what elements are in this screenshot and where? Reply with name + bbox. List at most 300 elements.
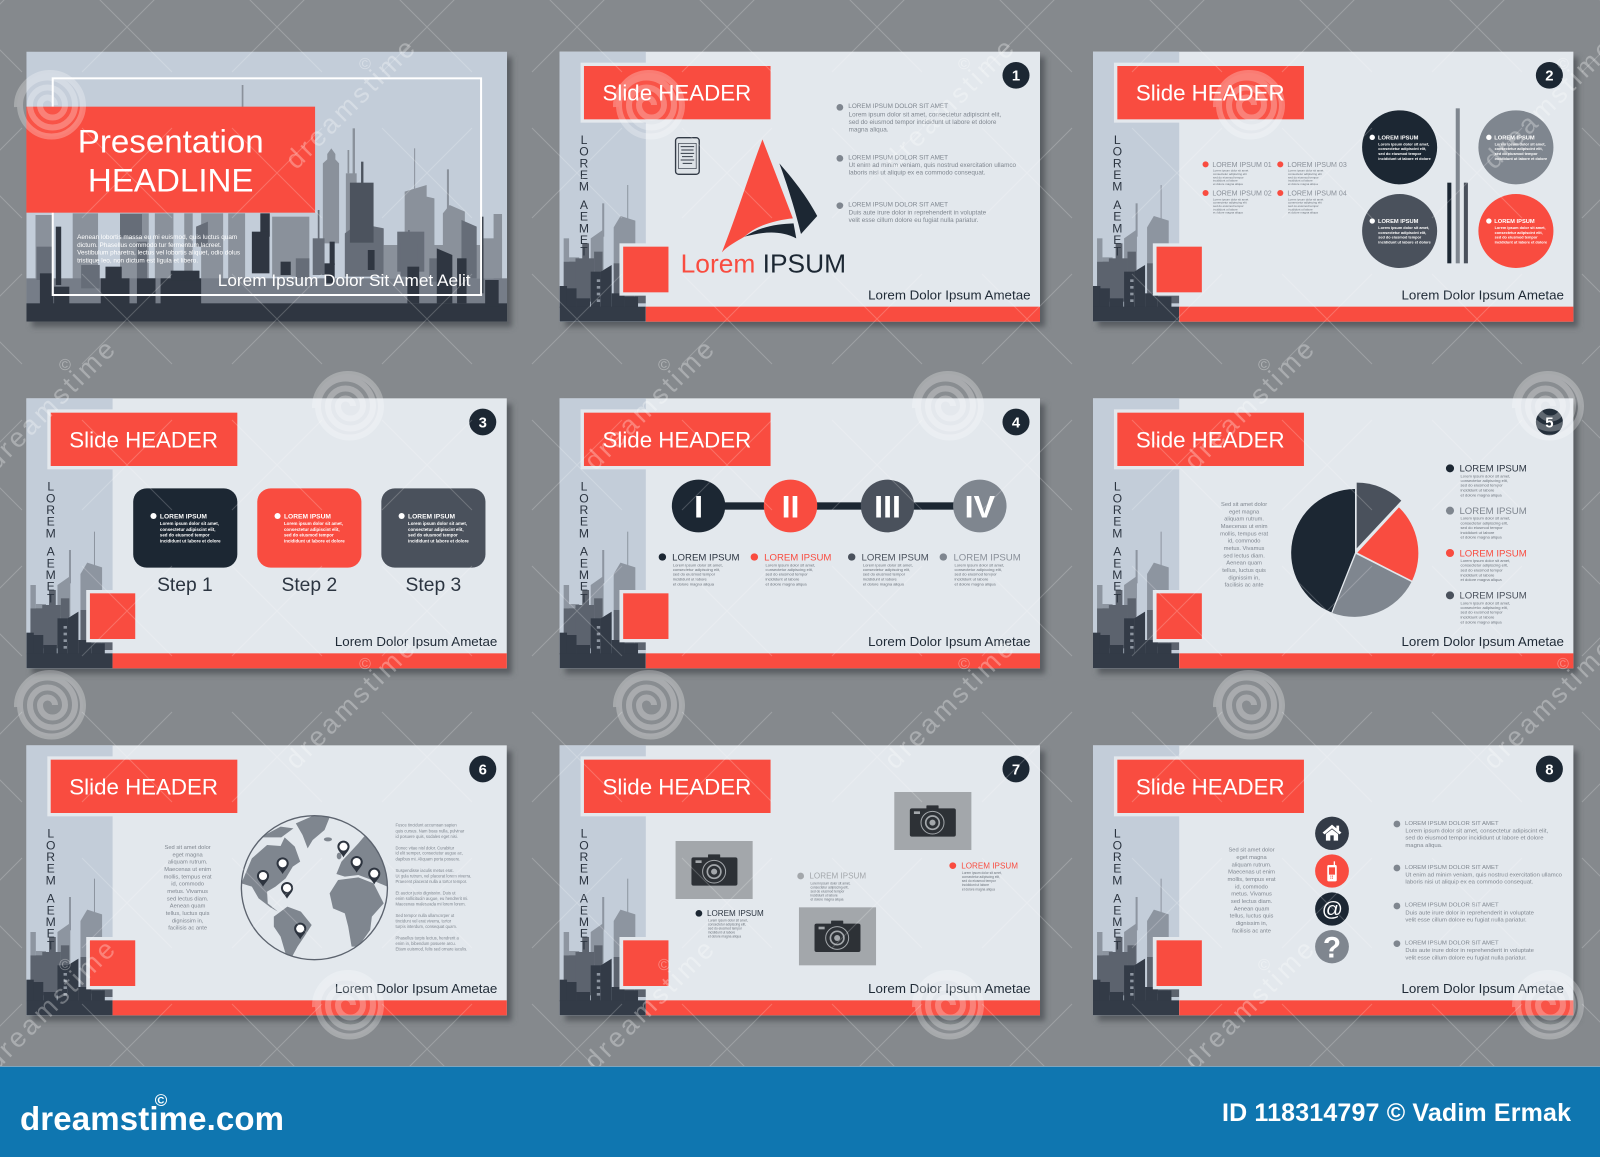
bullet list: LOREM IPSUM DOLOR SIT AMET (848, 154, 948, 161)
watermark text: dreamstime (578, 934, 720, 1076)
body copy: sed lectus diam. (167, 896, 209, 902)
timeline item 3: consectetur adipiscing elit, (863, 567, 910, 572)
right column copy: tincidunt vel erat viverra, tortor (396, 918, 452, 923)
legend: et dolore magna aliqua (1460, 492, 1502, 497)
legend: consectetur adipiscing elit, (1460, 563, 1508, 568)
body copy: Sed sit amet dolor (165, 845, 211, 851)
photo placeholder 1 (676, 841, 753, 899)
circle: dark: consectetur adipiscint elit, (1378, 147, 1426, 151)
list of four items: et dolore magna aliqua (1288, 182, 1318, 186)
watermark text: dreamstime (1178, 934, 1320, 1076)
watermark text: © (958, 656, 970, 673)
timeline item 4: consectetur adipiscing elit, (954, 567, 1002, 572)
body copy: Maecenas ut enim (1221, 524, 1268, 530)
step card 2: sed do eiusmod tempor (284, 533, 334, 538)
footer: Lorem Dolor Ipsum Ametae (1402, 981, 1564, 996)
panel: slide 1 logo (560, 52, 1040, 322)
watermark text: dreamstime (578, 334, 720, 476)
caption red: sed do eiusmod tempor (962, 879, 997, 883)
body copy: metus. Vivamus (167, 889, 208, 895)
caption red: et dolore magna aliqua (962, 887, 995, 891)
legend: et dolore magna aliqua (1460, 577, 1502, 582)
bullet list: Lorem ipsum dolor sit amet, consectetur adipiscint elit, (849, 111, 1002, 118)
list of four items: Lorem ipsum dolor sit amet (1213, 197, 1248, 201)
watermark text: dreamstime (878, 633, 1020, 775)
legend: et dolore magna aliqua (1460, 535, 1502, 540)
timeline item 1: sed do eiusmod tempor (673, 572, 716, 577)
list of four items: consectetur adipiscing elit (1213, 201, 1247, 205)
panel: slide 6 world map (26, 745, 507, 1015)
circle: grey: sed do eiusmod tempor (1495, 152, 1538, 156)
right column copy: Et auctor justo dignissim. Duis ut (396, 891, 456, 896)
number: 2 (1545, 69, 1554, 85)
timeline item 4: sed do eiusmod tempor (954, 572, 997, 577)
caption red: incididunt ut labore (962, 883, 989, 887)
bars (1447, 108, 1468, 263)
body copy: Aenean quam (1226, 561, 1262, 567)
number: 6 (479, 762, 487, 778)
footer: Lorem Dolor Ipsum Ametae (868, 634, 1031, 649)
step card 1: consectetur adipiscint elit, (160, 527, 215, 532)
globe with pins (241, 816, 387, 960)
watermark text: © (359, 656, 371, 673)
circle: slate: incididunt ut labore et dolore (1378, 241, 1431, 245)
caption red: consectetur adipiscing elit, (962, 875, 1000, 879)
legend: incididunt ut labore (1460, 488, 1495, 493)
right column copy: id elit semper, consectetur augue ac, (396, 851, 463, 856)
list of four items: et dolore magna aliqua (1288, 211, 1318, 215)
watermark text: © (658, 357, 670, 374)
timeline item 3 (848, 552, 929, 586)
body copy: Aenean quam (170, 904, 206, 910)
caption grey: incididunt ut labore (810, 893, 838, 897)
white frame (53, 78, 481, 295)
caption dark: sed do eiusmod tempor (708, 926, 743, 930)
number: 1 (1012, 69, 1020, 85)
timeline item 1 (659, 552, 740, 586)
bullet list: laboris nisi ut aliquip ex ea commodo consequat. (849, 170, 986, 177)
watermark text: dreamstime (878, 33, 1020, 175)
icon: phone (1315, 854, 1349, 888)
timeline item 1: Lorem ipsum dolor sit amet, (673, 562, 723, 567)
bullet list (1394, 821, 1563, 961)
image id and author: ID 118314797 © Vadim Ermak (1222, 1099, 1571, 1127)
circle: dark: incididunt ut labore et dolore (1378, 157, 1431, 161)
legend: consectetur adipiscing elit, (1460, 478, 1508, 483)
brand logo: dreamstime.com (20, 1100, 284, 1137)
right column copy: Praesent placerat nulla a tortor tempor. (396, 879, 467, 884)
footer: Lorem Dolor Ipsum Ametae (868, 287, 1031, 302)
icon: question mark: ? (1323, 932, 1341, 964)
step card 1: incididunt ut labore et dolore (160, 539, 221, 544)
caption grey: consectetur adipiscing elit, (810, 885, 849, 889)
panel: slide 4 timeline (560, 398, 1040, 668)
legend: sed do eiusmod tempor (1460, 525, 1503, 530)
logo text: Lorem IPSUM (681, 249, 846, 278)
timeline item 1: incididunt ut labore (673, 577, 708, 582)
cover body text: Vestibulum pharetra, lectus vel lobortis aliquet, odio dolus (77, 250, 240, 257)
circle: grey (1478, 110, 1553, 184)
caption dark: consectetur adipiscing elit, (708, 922, 746, 926)
headline: HEADLINE (88, 162, 254, 199)
legend (1446, 464, 1527, 624)
body copy: tellus, luctus quis (166, 911, 210, 917)
bottom brand band (0, 1066, 1600, 1157)
right column copy: Etiam euismod, felis sed ornare iaculis. (396, 947, 467, 952)
right column copy: Phasellus turpis lectus, hendrerit a (396, 936, 460, 941)
cover red title block (26, 107, 315, 213)
circle: dark: LOREM IPSUM (1378, 135, 1419, 141)
step card 2: consectetur adipiscint elit, (284, 527, 340, 532)
body copy: mollis, tempus erat (1228, 877, 1276, 883)
number: 8 (1545, 762, 1554, 778)
step labels: Step 1 (157, 575, 213, 596)
body copy: tellus, luctus quis (1222, 568, 1266, 574)
slide header: Slide HEADER (1136, 774, 1285, 799)
timeline item 4: incididunt ut labore (954, 577, 989, 582)
caption dark: incididunt ut labore (708, 930, 735, 934)
caption grey (797, 872, 866, 901)
step card 3: incididunt ut labore et dolore (408, 539, 469, 544)
icon: question mark (1315, 930, 1349, 964)
step card 3: LOREM IPSUM (408, 513, 456, 520)
timeline item 2: sed do eiusmod tempor (765, 572, 808, 577)
watermark text: © (59, 357, 71, 374)
timeline item 2 (751, 552, 831, 586)
list of four items: et dolore magna aliqua (1213, 182, 1243, 186)
number: 4 (1012, 415, 1021, 431)
bullet list: Ut enim ad minim veniam, quis nostrud exercitation ullamco (1405, 872, 1563, 878)
photo placeholder 2 (799, 907, 876, 965)
icon: tablet (676, 138, 699, 174)
list of four items (1203, 161, 1347, 215)
body copy: mollis, tempus erat (1220, 531, 1269, 537)
circle: dark: Lorem ipsum dolor sit amet, (1378, 142, 1429, 146)
watermark text: © (1557, 56, 1569, 73)
timeline: IV (965, 489, 996, 525)
body copy: eget magna (172, 852, 204, 858)
footer: Lorem Dolor Ipsum Ametae (1402, 287, 1564, 302)
list of four items: Lorem ipsum dolor sit amet (1213, 169, 1248, 173)
icon: at sign: @ (1321, 898, 1343, 921)
watermark text: dreamstime (279, 33, 421, 175)
list of four items: LOREM IPSUM 04 (1287, 191, 1347, 198)
bullet list: LOREM IPSUM DOLOR SIT AMET (848, 103, 948, 110)
slide header: Slide HEADER (603, 427, 751, 452)
bullet list: LOREM IPSUM DOLOR SIT AMET (848, 201, 948, 208)
legend: Lorem ipsum dolor sit amet, (1460, 600, 1510, 605)
timeline item 2: Lorem ipsum dolor sit amet, (765, 562, 815, 567)
timeline item 3: LOREM IPSUM (862, 552, 929, 563)
body copy: Maecenas ut enim (164, 867, 211, 873)
right column copy: quis cursus. Nam boas nulla, pulvinar (396, 828, 465, 833)
bullet list: velit esse cillum dolore eu fugiat nulla pariatur. (1405, 918, 1527, 924)
circle: red: sed do eiusmod tempor (1495, 236, 1538, 240)
slide header: Slide HEADER (1136, 427, 1285, 452)
bullet list: LOREM IPSUM DOLOR SIT AMET (1405, 821, 1499, 827)
timeline: II (782, 489, 799, 525)
step card 2: incididunt ut labore et dolore (284, 539, 345, 544)
caption dark (696, 909, 764, 938)
list of four items: LOREM IPSUM 03 (1287, 162, 1347, 169)
list of four items: incididunt ut labore (1213, 179, 1238, 183)
legend: incididunt ut labore (1460, 615, 1495, 620)
legend: sed do eiusmod tempor (1460, 483, 1503, 488)
circle: slate: LOREM IPSUM (1378, 219, 1419, 225)
right column copy: Suspendisse iaculis metus erat. (396, 868, 454, 873)
watermark text: dreamstime (279, 633, 421, 775)
body copy: aliquam rutrum. (1232, 862, 1272, 868)
timeline item 2: et dolore magna aliqua (765, 581, 807, 586)
step card 1 (133, 488, 237, 568)
circle: grey: consectetur adipiscint elit, (1495, 147, 1543, 151)
timeline item 3: Lorem ipsum dolor sit amet, (863, 562, 913, 567)
watermark text: © (1258, 957, 1270, 974)
right column copy: enim sollicitudin augue, eu hendrerit mi. (396, 896, 468, 901)
side label: LOREM AEMET (579, 133, 589, 259)
body copy: metus. Vivamus (1224, 546, 1265, 552)
body copy: sed lectus diam. (1231, 899, 1273, 905)
footer: Lorem Dolor Ipsum Ametae (1402, 634, 1564, 649)
step card 1: Lorem ipsum dolor sit amet, (160, 521, 219, 526)
body copy: dignissim in, (1236, 921, 1268, 927)
circle: slate: consectetur adipiscint elit, (1378, 231, 1426, 235)
body copy: facilisis ac ante (1225, 583, 1264, 589)
panel: cover slide (26, 52, 507, 322)
body copy: dignissim in, (172, 918, 204, 924)
number: 3 (479, 415, 487, 431)
legend: sed do eiusmod tempor (1460, 610, 1503, 615)
circle: grey: Lorem ipsum dolor sit amet, (1495, 142, 1546, 146)
timeline item 4: et dolore magna aliqua (954, 581, 996, 586)
bullet list: magna aliqua. (1405, 843, 1443, 849)
side label: LOREM AEMET (1112, 480, 1122, 605)
circle: red: incididunt ut labore et dolore (1495, 241, 1547, 245)
list of four items: sed do eiusmod tempor (1213, 204, 1244, 208)
footer: Lorem Dolor Ipsum Ametae (335, 981, 497, 996)
cover skyline (26, 52, 507, 322)
timeline item 2: LOREM IPSUM (764, 552, 831, 563)
number: 7 (1012, 762, 1020, 778)
timeline item 4: LOREM IPSUM (953, 552, 1021, 563)
caption dark: LOREM IPSUM (707, 909, 764, 918)
body copy: Sed sit amet dolor (1228, 848, 1275, 854)
step card 2: LOREM IPSUM (284, 513, 331, 520)
bullet list: sed do eiusmod tempor incididunt ut labore et dolore (849, 119, 997, 126)
caption grey: sed do eiusmod tempor (810, 889, 845, 893)
list of four items: et dolore magna aliqua (1213, 211, 1243, 215)
legend: incididunt ut labore (1460, 530, 1495, 535)
right column copy: id posuere quis, sodales eget nisi. (396, 834, 458, 839)
panel: slide 3 steps (26, 398, 507, 668)
bullet list: Duis aute irure dolor in reprehenderit in voluptate (1405, 910, 1535, 916)
panel: slide 5 pie chart (1093, 398, 1573, 668)
legend: incididunt ut labore (1460, 572, 1495, 577)
circle: red: consectetur adipiscint elit, (1495, 231, 1543, 235)
step card 2: Lorem ipsum dolor sit amet, (284, 521, 343, 526)
list of four items: consectetur adipiscing elit (1288, 172, 1322, 176)
photo placeholder 3 (894, 792, 971, 850)
timeline: III (874, 489, 901, 525)
watermark text: © (658, 957, 670, 974)
bullet list: Duis aute irure dolor in reprehenderit in voluptate (1405, 948, 1535, 954)
bullet list: velit esse cillum dolore eu fugiat nulla pariatur. (1405, 955, 1527, 961)
timeline item 2: consectetur adipiscing elit, (765, 567, 813, 572)
side label: LOREM AEMET (579, 480, 589, 605)
panel: slide 8 contact (1093, 745, 1573, 1015)
body copy: id, commodo (1228, 539, 1261, 545)
timeline item 3: sed do eiusmod tempor (863, 572, 906, 577)
step card 3: sed do eiusmod tempor (408, 533, 458, 538)
list of four items: LOREM IPSUM 02 (1212, 191, 1272, 198)
bullet list (836, 103, 1017, 224)
bullet list: laboris nisi ut aliquip ex ea commodo consequat. (1405, 880, 1534, 886)
headline: Presentation (78, 123, 264, 159)
circle: slate: sed do eiusmod tempor (1378, 236, 1422, 240)
circle: slate: Lorem ipsum dolor sit amet, (1378, 226, 1429, 230)
body copy: Maecenas ut enim (1228, 870, 1275, 876)
list of four items: consectetur adipiscing elit (1288, 201, 1322, 205)
bullet list: Duis aute irure dolor in reprehenderit in voluptate (849, 209, 987, 216)
list of four items: LOREM IPSUM 01 (1212, 162, 1272, 169)
timeline item 1: et dolore magna aliqua (673, 581, 715, 586)
body copy: id, commodo (1235, 884, 1268, 890)
legend: LOREM IPSUM (1459, 548, 1527, 559)
legend: Lorem ipsum dolor sit amet, (1460, 558, 1510, 563)
step card 3: Lorem ipsum dolor sit amet, (408, 521, 467, 526)
watermark text: © (1557, 656, 1569, 673)
timeline (672, 480, 1007, 532)
icon: home (1315, 817, 1349, 850)
body copy: eget magna (1236, 855, 1268, 861)
list of four items: incididunt ut labore (1288, 207, 1313, 211)
step card 3: consectetur adipiscint elit, (408, 527, 464, 532)
legend: LOREM IPSUM (1459, 591, 1527, 602)
caption grey: et dolore magna aliqua (810, 897, 844, 901)
list of four items: consectetur adipiscing elit (1213, 172, 1247, 176)
bullet list: LOREM IPSUM DOLOR SIT AMET (1405, 903, 1499, 909)
step card 2 (257, 488, 361, 568)
side label: LOREM AEMET (579, 827, 589, 952)
body copy: aliquam rutrum. (168, 860, 208, 866)
legend: sed do eiusmod tempor (1460, 567, 1503, 572)
cover body text: tristique leo, non dictum est ligula et libero. (77, 257, 198, 264)
caption red (949, 861, 1018, 891)
timeline item 3: et dolore magna aliqua (863, 581, 905, 586)
slide header: Slide HEADER (69, 427, 218, 452)
right column copy: Donec vitae nisl dolor. Curabitur (396, 845, 455, 850)
legend: consectetur adipiscing elit, (1460, 605, 1508, 610)
caption grey: LOREM IPSUM (809, 872, 866, 881)
body copy: eget magna (1229, 509, 1260, 515)
slide header: Slide HEADER (1136, 81, 1285, 106)
panel: slide 7 photos (560, 745, 1040, 1015)
circle: dark (1362, 110, 1437, 184)
circle: grey: incididunt ut labore et dolore (1495, 157, 1547, 161)
body copy: mollis, tempus erat (164, 874, 212, 880)
caption red: LOREM IPSUM (961, 861, 1018, 870)
legend: Lorem ipsum dolor sit amet, (1460, 516, 1510, 521)
timeline: I (694, 489, 703, 525)
body copy: sed lectus diam. (1223, 553, 1265, 559)
cover subtitle: Lorem Ipsum Dolor Sit Amet Aelit (218, 271, 471, 290)
body copy: Sed sit amet dolor (1221, 502, 1267, 508)
bullet list: velit esse cillum dolore eu fugiat nulla pariatur. (849, 217, 979, 224)
right column copy: Sed tempor nulla ullamcorper ut (396, 913, 455, 918)
bullet list: Lorem ipsum dolor sit amet, consectetur adipiscint elit, (1405, 828, 1548, 834)
watermark text: © (59, 957, 71, 974)
slide header: Slide HEADER (603, 774, 751, 799)
caption dark: Lorem ipsum dolor sit amet, (708, 919, 748, 923)
right column copy: Ut gula rutrum, vel placerat lorem viverra. (396, 873, 471, 878)
body copy: facilisis ac ante (168, 926, 207, 932)
right column copy: Fusce tincidunt accumsan sapien (396, 823, 457, 828)
body copy: facilisis ac ante (1232, 928, 1271, 934)
legend: consectetur adipiscing elit, (1460, 520, 1508, 525)
circle: grey: LOREM IPSUM (1494, 135, 1535, 141)
body copy: aliquam rutrum. (1224, 517, 1264, 523)
timeline item 4 (940, 552, 1021, 586)
list of four items: sed do eiusmod tempor (1288, 175, 1319, 179)
slide header: Slide HEADER (603, 81, 751, 106)
panel: slide 2 circles (1093, 52, 1573, 322)
bullet list: LOREM IPSUM DOLOR SIT AMET (1405, 940, 1499, 946)
list of four items: incididunt ut labore (1213, 207, 1238, 211)
legend: et dolore magna aliqua (1460, 619, 1502, 624)
brand copyright mark: © (155, 1091, 168, 1110)
side label: LOREM AEMET (1112, 133, 1122, 259)
timeline item 4: Lorem ipsum dolor sit amet, (954, 562, 1004, 567)
timeline item 3: incididunt ut labore (863, 577, 898, 582)
bullet list: LOREM IPSUM DOLOR SIT AMET (1405, 865, 1499, 871)
circle: dark: sed do eiusmod tempor (1378, 152, 1422, 156)
legend: Lorem ipsum dolor sit amet, (1460, 473, 1510, 478)
icon: at sign (1315, 892, 1349, 926)
list of four items: sed do eiusmod tempor (1288, 204, 1319, 208)
caption red: Lorem ipsum dolor sit amet, (962, 871, 1002, 875)
step card 1: sed do eiusmod tempor (160, 533, 210, 538)
right column copy: dapibus mi. Aliquam porta posuere. (396, 856, 460, 861)
cover body text: dictum. Phasellus commodo tur fermentum lacreet. (77, 242, 222, 249)
caption grey: Lorem ipsum dolor sit amet, (810, 881, 851, 885)
slide header: Slide HEADER (69, 774, 218, 799)
step card 3 (381, 488, 485, 568)
list of four items: incididunt ut labore (1288, 179, 1313, 183)
legend: LOREM IPSUM (1459, 506, 1527, 517)
circle: red: LOREM IPSUM (1494, 219, 1535, 225)
list of four items: Lorem ipsum dolor sit amet (1288, 169, 1324, 173)
timeline item 2: incididunt ut labore (765, 577, 800, 582)
bullet list: sed do eiusmod tempor incididunt ut labore et dolore (1405, 836, 1544, 842)
side label: LOREM AEMET (46, 480, 56, 605)
list of four items: sed do eiusmod tempor (1213, 175, 1244, 179)
step labels: Step 3 (406, 575, 461, 596)
watermark text: © (958, 56, 970, 73)
side label: LOREM AEMET (1112, 827, 1122, 952)
bullet list: Ut enim ad minim veniam, quis nostrud exercitation ullamco (849, 162, 1017, 169)
circle: slate (1362, 194, 1437, 268)
right column copy: enim in, bibendum posuere arcu. (396, 941, 456, 946)
bullet list: magna aliqua. (849, 127, 889, 134)
watermark text: © (1258, 357, 1270, 374)
step labels: Step 2 (281, 575, 337, 596)
watermark text: dreamstime (1178, 334, 1320, 476)
step card 1: LOREM IPSUM (160, 513, 207, 520)
right column copy: turpis interdum, consequat quam. (396, 924, 457, 929)
watermark text: © (359, 56, 371, 73)
list of four items: Lorem ipsum dolor sit amet (1288, 197, 1324, 201)
body copy: dignissim in, (1228, 575, 1260, 581)
